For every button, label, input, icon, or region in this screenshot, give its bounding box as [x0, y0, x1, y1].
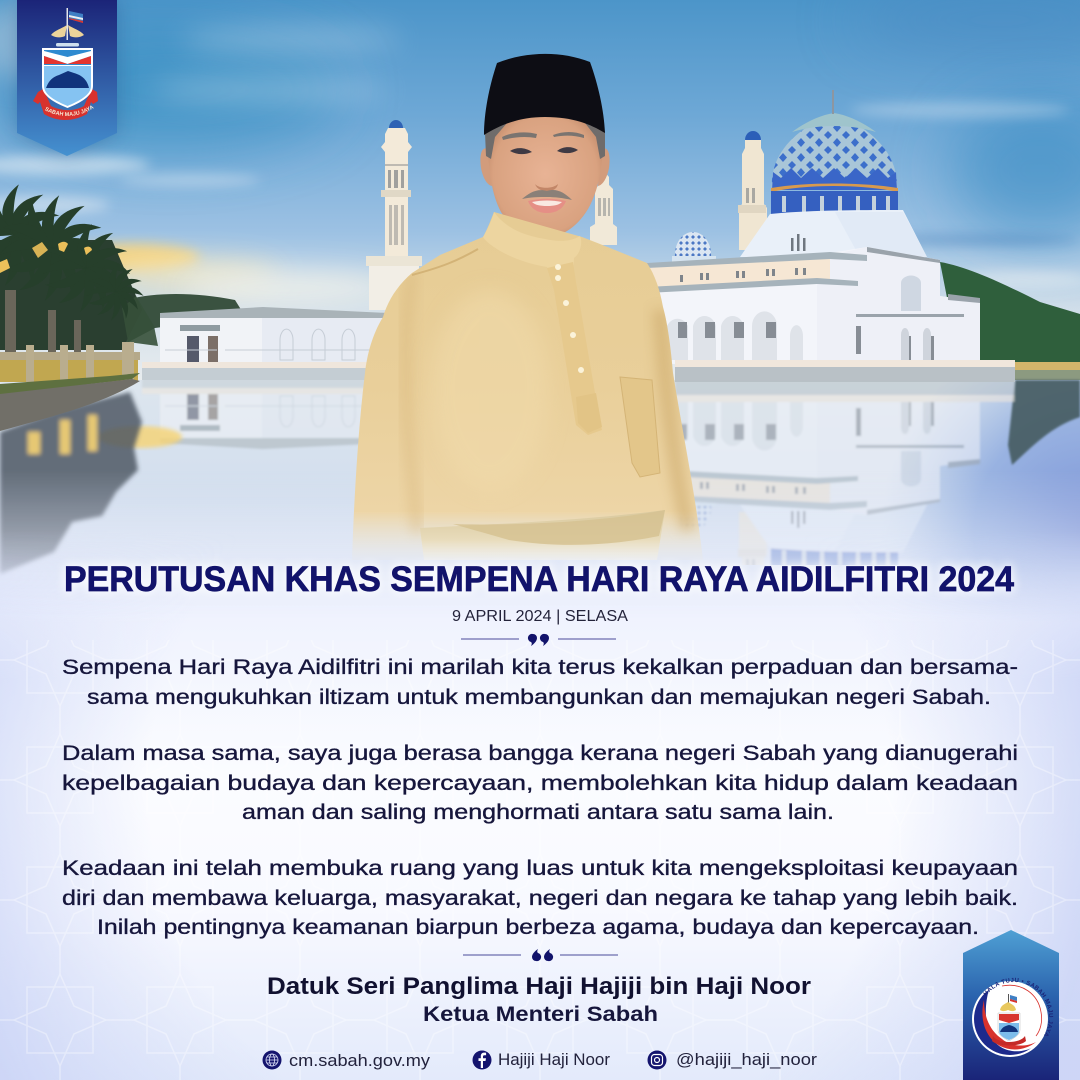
badge: HALA TUJU • SABAH MAJU JAYA	[983, 978, 1054, 1036]
message paragraph 2: Dalam masa sama, saya juga berasa bangga kerana negeri Sabah yang dianugerahi	[62, 742, 1018, 765]
hair	[485, 123, 605, 159]
badge crest	[992, 994, 1026, 1046]
message paragraph 1	[62, 656, 1018, 709]
hill behind the mosque	[940, 262, 1080, 380]
message paragraph 3	[62, 857, 1018, 939]
icon: globe	[262, 1050, 282, 1070]
message paragraph 1: sama mengukuhkan iltizam untuk membangunkan dan memajukan negeri Sabah.	[87, 686, 991, 709]
message paragraph 2: kepelbagaian budaya dan kepercayaan, membolehkan kita hidup dalam keadaan	[62, 772, 1018, 795]
moustache	[522, 190, 572, 200]
songkok	[484, 54, 605, 135]
message paragraph 2	[62, 742, 1018, 824]
icon: instagram	[648, 1050, 666, 1070]
lower page background	[0, 470, 1080, 1080]
ears	[480, 148, 610, 186]
shirt shading	[406, 249, 688, 533]
shirt buttons	[555, 264, 584, 373]
shirt collar	[483, 212, 581, 285]
footer: website: cm.sabah.gov.my	[289, 1052, 431, 1070]
signatory name: Datuk Seri Panglima Haji Hajiji bin Haji Noor	[267, 973, 811, 1000]
arches	[667, 311, 803, 360]
small dome	[675, 232, 711, 258]
mosque reflection on water	[142, 380, 1016, 565]
platform	[675, 360, 1015, 367]
building body	[647, 247, 980, 364]
side lavender tints	[0, 530, 1080, 1080]
roof	[740, 210, 927, 257]
opening quote divider	[461, 634, 616, 646]
icon: facebook	[472, 1050, 492, 1070]
face	[488, 110, 603, 238]
water surface	[0, 380, 1080, 620]
left treeline	[125, 294, 245, 344]
icon: shield	[42, 48, 93, 108]
top-left ribbon with state crest	[8, 0, 122, 164]
main mosque	[647, 90, 1015, 382]
shirt placket	[547, 262, 602, 435]
footer: facebook: Hajiji Haji Noor	[498, 1051, 611, 1069]
palm trees and bank on left	[0, 184, 158, 431]
nose	[535, 184, 558, 191]
hill reflection on the water	[1008, 380, 1080, 465]
right minaret	[739, 139, 767, 250]
right water tint	[860, 380, 1080, 680]
date: 9 APRIL 2024 | SELASA	[452, 608, 629, 625]
message paragraph 3: diri dan membawa keluarga, masyarakat, negeri dan negara ke tahap yang lebih baik.	[62, 887, 1018, 910]
title: PERUTUSAN KHAS SEMPENA HARI RAYA AIDILFITRI 2024	[64, 560, 1015, 599]
message paragraph 3: Inilah pentingnya keamanan biarpun berbeza agama, budaya dan kepercayaan.	[97, 916, 979, 939]
footer: instagram: @hajiji_haji_noor	[676, 1051, 818, 1069]
second minaret behind the portrait	[590, 171, 617, 245]
shirt pocket	[620, 377, 660, 477]
mouth	[528, 199, 566, 213]
left minaret	[366, 120, 422, 310]
bottom-right ribbon with badge	[963, 930, 1059, 1080]
closing quote divider	[463, 949, 618, 961]
background: sky and clouds	[0, 0, 1080, 385]
signatory title: Ketua Menteri Sabah	[423, 1003, 658, 1026]
portrait of the Chief Minister	[352, 54, 703, 560]
message paragraph 1: Sempena Hari Raya Aidilfitri ini marilah kita terus kekalkan perpaduan dan bersama-	[62, 656, 1018, 679]
title glow: PERUTUSAN KHAS SEMPENA HARI RAYA AIDILFITRI 2024	[64, 560, 1015, 599]
palm reflection on water	[0, 392, 142, 574]
shirt silhouette	[352, 212, 703, 560]
geometric background pattern	[0, 640, 1080, 1080]
sky glimpse reflected in water	[98, 426, 182, 448]
left mosque annex	[142, 307, 388, 380]
main dome	[772, 113, 897, 190]
eyebrows	[502, 132, 584, 140]
icon: flag	[51, 8, 84, 46]
message paragraph 3: Keadaan ini telah membuka ruang yang luas untuk kita mengeksploitasi keupayaan	[62, 857, 1018, 880]
eyes	[510, 147, 578, 154]
icon: red motto scroll	[33, 89, 98, 120]
woven waist sash	[420, 510, 665, 560]
message paragraph 2: aman dan saling menghormati antara satu sama lain.	[242, 801, 834, 824]
icon: red motto scroll: SABAH MAJU JAYA	[45, 106, 94, 116]
badge	[972, 978, 1054, 1057]
